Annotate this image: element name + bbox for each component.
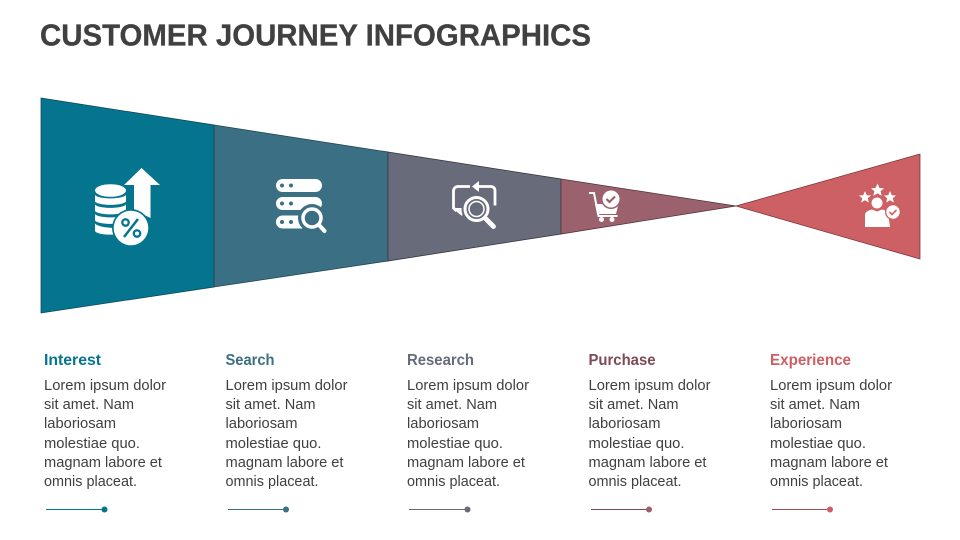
column: search: molestiae quo. [226, 436, 322, 452]
icon: coins with up arrow and percent [95, 168, 160, 247]
funnel segment: experience [736, 154, 920, 259]
column: purchase: omnis placeat. [588, 474, 682, 490]
column: interest: laboriosam [44, 416, 116, 432]
column: search [226, 352, 348, 512]
column: research: magnam labore et [407, 455, 525, 471]
funnel segment: search [214, 125, 388, 287]
column: search: Lorem ipsum dolor [226, 378, 348, 394]
column: search: magnam labore et [226, 455, 344, 471]
column: search: omnis placeat. [226, 474, 318, 490]
column: experience: molestiae quo. [770, 436, 866, 452]
column: experience: magnam labore et [770, 455, 888, 471]
column: research: laboriosam [407, 416, 479, 432]
icon: cart with check [589, 189, 621, 222]
icon: person with stars and check [859, 184, 901, 227]
funnel segment: research [388, 152, 561, 261]
funnel diagram [41, 98, 920, 313]
column: purchase: sit amet. Nam [588, 397, 678, 413]
column: purchase: molestiae quo. [588, 436, 684, 452]
column: interest: omnis placeat. [44, 474, 137, 490]
icon: research loop with magnifier [452, 181, 495, 226]
column: experience: laboriosam [770, 416, 842, 432]
column: experience: Lorem ipsum dolor [770, 378, 892, 394]
funnel segment: purchase [561, 179, 736, 234]
column: research: Research [407, 352, 474, 369]
column: interest: magnam labore et [44, 455, 162, 471]
column: interest: sit amet. Nam [44, 397, 134, 413]
column: search: laboriosam [226, 416, 298, 432]
column: research: sit amet. Nam [407, 397, 497, 413]
column: purchase: magnam labore et [588, 455, 706, 471]
column: research: Lorem ipsum dolor [407, 378, 529, 394]
title: CUSTOMER JOURNEY INFOGRAPHICS [40, 18, 591, 52]
column: experience [770, 352, 892, 512]
column: interest [44, 352, 166, 512]
column: interest: Interest [44, 352, 102, 369]
column: purchase: Purchase [588, 352, 656, 369]
funnel segment: interest [41, 98, 214, 313]
column: purchase [588, 352, 711, 512]
icon: database search [276, 179, 326, 232]
column: experience: sit amet. Nam [770, 397, 860, 413]
column: experience: Experience [770, 352, 851, 369]
column: interest: molestiae quo. [44, 436, 140, 452]
column: interest: Lorem ipsum dolor [44, 378, 166, 394]
column: search: sit amet. Nam [226, 397, 316, 413]
column: research: omnis placeat. [407, 474, 500, 490]
column: purchase: laboriosam [588, 416, 660, 432]
column: purchase: Lorem ipsum dolor [588, 378, 711, 394]
column: research [407, 352, 529, 512]
column: search: Search [226, 352, 274, 369]
column: research: molestiae quo. [407, 436, 503, 452]
column: experience: omnis placeat. [770, 474, 863, 490]
